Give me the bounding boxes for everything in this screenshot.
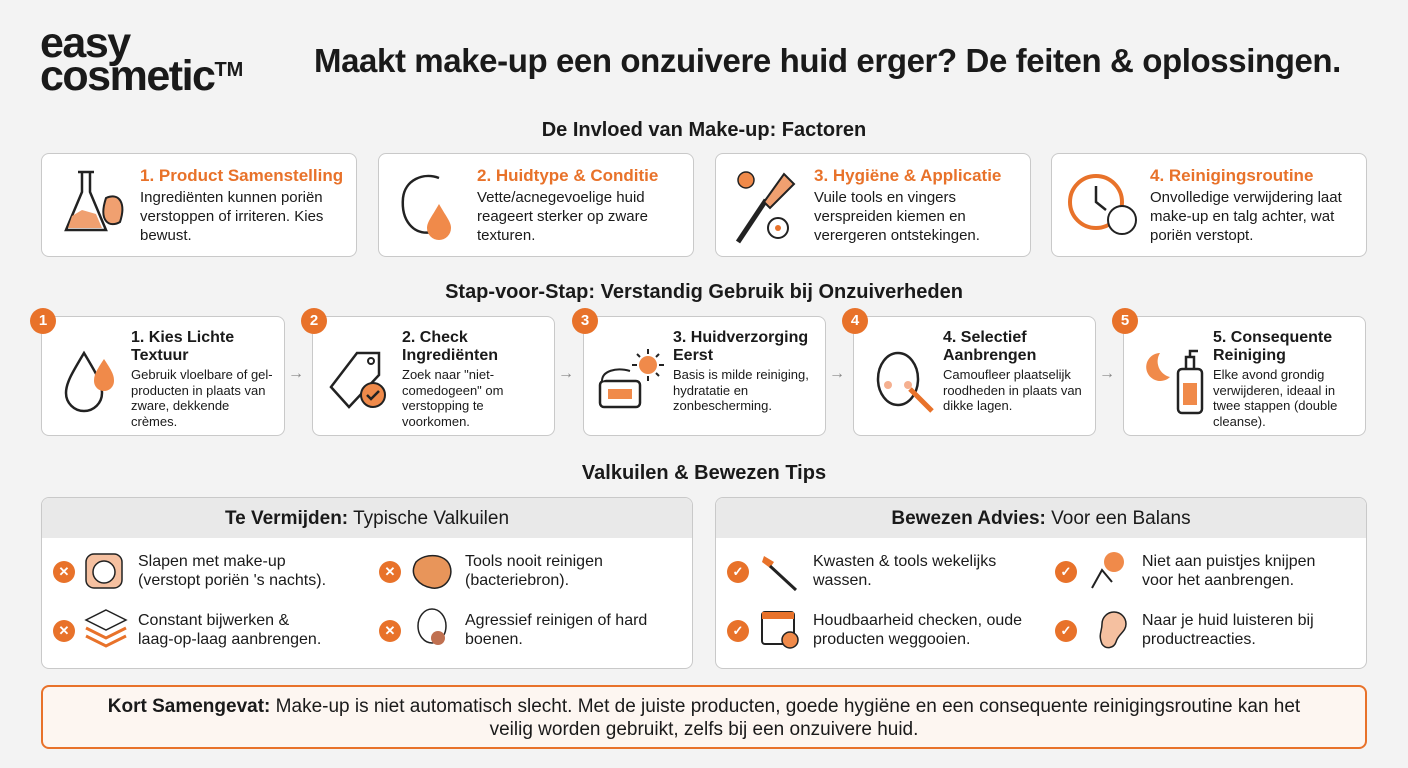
panel: te vermijden: ✕ [59, 564, 69, 579]
heading: factoren: De Invloed van Make-up: Factoren [542, 119, 866, 141]
panel: bewezen advies: Kwasten & tools wekelijks [813, 553, 996, 570]
factor card 1: 1. Product Samenstelling [140, 166, 343, 185]
factor card 3: Vuile tools en vingers verspreiden kiemen en verergeren ontstekingen. [814, 189, 980, 244]
badge 3 [572, 308, 598, 334]
icon: jar sun [598, 349, 664, 408]
step 5: Elke avond grondig verwijderen, ideaal in twee stappen (double cleanse). [1213, 367, 1337, 428]
factor card 4: 4. Reinigingsroutine [1150, 166, 1313, 185]
badge 4: 4 [851, 312, 859, 329]
badge 4 [842, 308, 868, 334]
icon: tag check [329, 352, 386, 409]
panel: bewezen advies: producten weggooien. [813, 631, 970, 648]
title: Maakt make-up een onzuivere huid erger? De feiten & oplossingen. [314, 42, 1341, 79]
badge 5 [1112, 308, 1138, 334]
panel: bewezen advies: Niet aan puistjes knijpen [1142, 553, 1315, 570]
panel: bewezen advies: productreacties. [1142, 631, 1256, 648]
arrow: → [288, 365, 304, 382]
step 1: 1. Kies Lichte Textuur [131, 329, 234, 364]
factor card 2 [378, 153, 694, 257]
logo: cosmeticTM [40, 52, 243, 100]
panel: te vermijden: laag-op-laag aanbrengen. [138, 631, 321, 648]
panel: te vermijden: ✕ [385, 623, 395, 638]
panel: bewezen advies: ✓ [1061, 623, 1071, 638]
step 4: Camoufleer plaatselijk roodheden in plaats van dikke lagen. [943, 367, 1082, 413]
icon: drops [64, 350, 114, 412]
icon: flask [64, 170, 124, 232]
step 1: Gebruik vloelbare of gel-producten in plaats van zware, dekkende crèmes. [131, 367, 273, 428]
arrow: → [558, 365, 574, 382]
panel: te vermijden: ✕ [385, 564, 395, 579]
panel: bewezen advies: ✓ [733, 564, 743, 579]
panel: bewezen advies [715, 497, 1367, 669]
panel: te vermijden: (verstopt poriën 's nachts). [138, 572, 326, 589]
icon: brush germs [736, 171, 796, 244]
step 3: 3. Huidverzorging Eerst [673, 329, 808, 364]
factor card 3 [715, 153, 1031, 257]
arrow: → [829, 365, 845, 382]
badge 5: 5 [1121, 312, 1129, 329]
badge 2: 2 [310, 312, 318, 329]
step 3 [583, 316, 826, 436]
icon: moon bottle [1146, 350, 1204, 414]
panel: bewezen advies: ✓ [733, 623, 743, 638]
factor card 4: Onvolledige verwijdering laat make-up en talg achter, wat poriën verstopt. [1150, 189, 1342, 244]
step 4 [853, 316, 1096, 436]
panel: te vermijden: Te Vermijden: Typische Valkuilen [225, 508, 509, 529]
badge 1 [30, 308, 56, 334]
summary callout: Kort Samengevat: Make-up is niet automatisch slecht. Met de juiste producten, goede hygiëne en een consequente reinigingsroutine kan het [108, 696, 1300, 717]
panel: bewezen advies: wassen. [813, 572, 872, 589]
step 2 [312, 316, 555, 436]
panel: bewezen advies: Houdbaarheid checken, oude [813, 612, 1022, 629]
step 1 [41, 316, 285, 436]
factor card 4 [1051, 153, 1367, 257]
step 2: Zoek naar "niet-comedogeen" om verstopping te voorkomen. [402, 367, 503, 428]
step 4: 4. Selectief Aanbrengen [943, 329, 1036, 364]
factor card 1 [41, 153, 357, 257]
panel: bewezen advies: Bewezen Advies: Voor een Balans [891, 508, 1191, 529]
step 5 [1123, 316, 1366, 436]
factor card 3: 3. Hygiëne & Applicatie [814, 166, 1001, 185]
summary callout [41, 685, 1367, 749]
panel: te vermijden: Agressief reinigen of hard [465, 612, 647, 629]
panel: te vermijden: (bacteriebron). [465, 572, 569, 589]
step 3: Basis is milde reiniging, hydratatie en zonbescherming. [673, 367, 809, 413]
step 5: 5. Consequente Reiniging [1213, 329, 1332, 364]
icon: clock face [1068, 174, 1137, 235]
factor card 1: Ingrediënten kunnen poriën verstoppen of irriteren. Kies bewust. [140, 189, 323, 244]
panel: te vermijden: boenen. [465, 631, 523, 648]
logo: easy [40, 19, 130, 67]
panel: te vermijden: Constant bijwerken & [138, 612, 289, 629]
panel: bewezen advies: ✓ [1061, 564, 1071, 579]
badge 1: 1 [39, 312, 47, 329]
summary callout: veilig worden gebruikt, zelfs bij een onzuivere huid. [490, 719, 918, 740]
badge 2 [301, 308, 327, 334]
panel: te vermijden [41, 497, 693, 669]
badge 3: 3 [581, 312, 589, 329]
panel: te vermijden: Slapen met make-up [138, 553, 286, 570]
icon: face drop [402, 174, 451, 240]
icon: face brush [876, 352, 934, 413]
heading: stappen: Stap-voor-Stap: Verstandig Gebruik bij Onzuiverheden [445, 281, 963, 303]
heading: valkuilen: Valkuilen & Bewezen Tips [582, 462, 826, 484]
step 2: 2. Check Ingrediënten [402, 329, 498, 364]
factor card 2: Vette/acnegevoelige huid reageert sterker op zware texturen. [477, 189, 648, 244]
panel: te vermijden: Tools nooit reinigen [465, 553, 603, 570]
panel: bewezen advies: Naar je huid luisteren bij [1142, 612, 1314, 629]
panel: te vermijden: ✕ [59, 623, 69, 638]
panel: bewezen advies: voor het aanbrengen. [1142, 572, 1294, 589]
arrow: → [1099, 365, 1115, 382]
factor card 2: 2. Huidtype & Conditie [477, 166, 658, 185]
logo [40, 19, 243, 100]
